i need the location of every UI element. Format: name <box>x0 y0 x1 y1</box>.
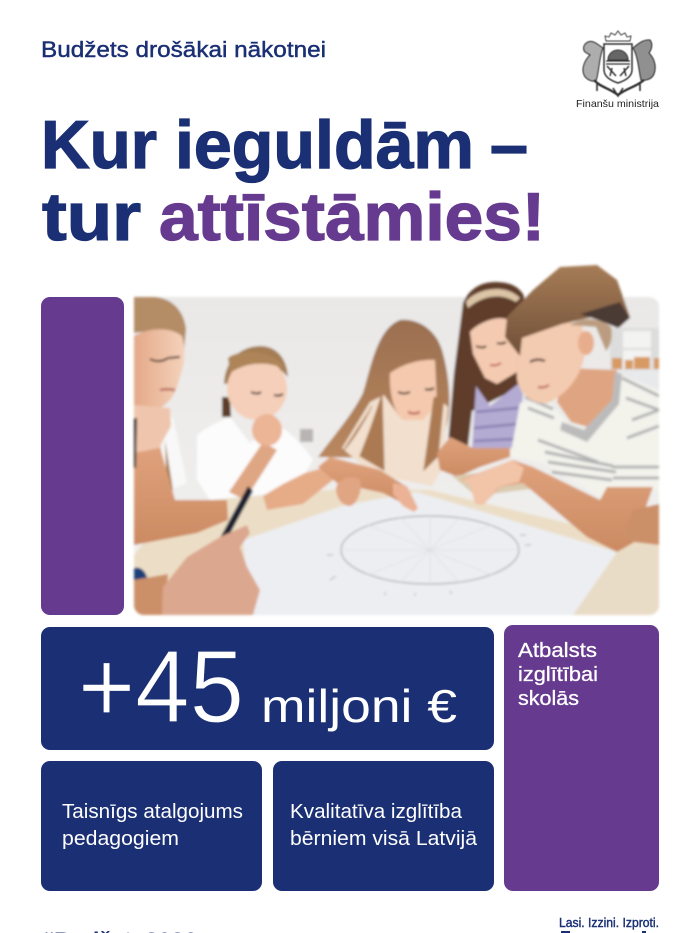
circle drawing <box>327 516 531 596</box>
table and paper sheet <box>134 489 659 615</box>
footer: tops of cropped social icons <box>561 931 646 933</box>
text: ministry name: Finanšu ministrija <box>576 98 659 110</box>
girl with headband <box>437 282 538 496</box>
title line 1 <box>41 107 528 183</box>
adult hand holding a pen <box>134 486 260 615</box>
footer tagline: Lasi. Izzini. Izproti. <box>559 916 659 930</box>
title line 2: attīstāmies! <box>159 179 545 255</box>
panel: fair pay for teachers <box>41 761 262 891</box>
title line 2: tur <box>42 179 141 255</box>
panel: quality education <box>273 761 494 891</box>
stat card: +45 miljoni € <box>41 627 494 750</box>
text: fair pay: pedagogiem <box>62 827 179 850</box>
title line 1: ieguldām <box>175 107 474 183</box>
girl second from left <box>197 346 333 510</box>
text: support label: Atbalsts <box>518 639 597 662</box>
photo background wall and shelves <box>134 295 661 552</box>
text: quality education: bērniem visā Latvijā <box>290 827 478 850</box>
boy in striped shirt <box>460 265 659 552</box>
text: fair pay: Taisnīgs atalgojums <box>62 800 243 823</box>
logo: Finanšu ministrija crest <box>576 31 659 110</box>
stat unit: miljoni € <box>261 680 457 732</box>
title line 1: Kur <box>41 107 157 183</box>
girl in the middle <box>318 320 449 512</box>
photo: children studying a circle drawing at a table <box>134 265 659 615</box>
title line 1: – <box>490 107 528 183</box>
panel: purple side bar <box>41 297 124 615</box>
girl far left <box>134 297 228 582</box>
heading: subtitle: Budžets drošākai nākotnei <box>41 37 326 62</box>
icon: coat of arms <box>583 31 655 96</box>
panel: support for education in schools <box>504 625 659 891</box>
text: quality education: Kvalitatīva izglītība <box>290 800 463 823</box>
stat value: +45 <box>78 629 244 744</box>
text: support label: skolās <box>518 687 579 710</box>
title <box>41 107 545 255</box>
text: support label: izglītībai <box>518 663 598 686</box>
